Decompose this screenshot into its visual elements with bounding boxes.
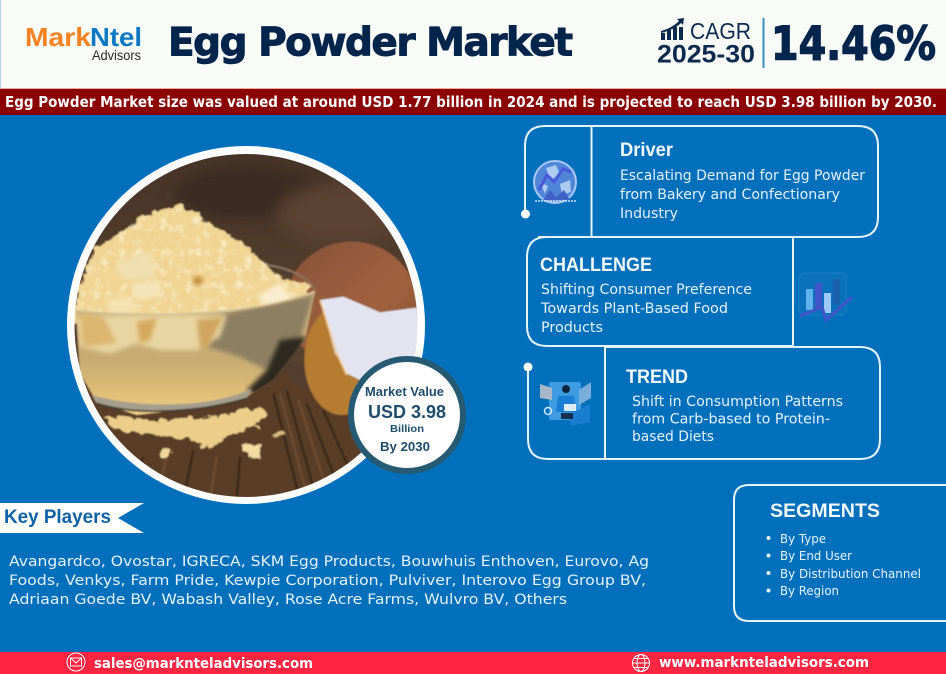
key players ribbon: Key Players bbox=[4, 506, 111, 528]
website: www.marknteladvisors.com bbox=[659, 655, 869, 671]
panel: trend bbox=[524, 347, 880, 460]
segments heading: SEGMENTS bbox=[770, 500, 880, 522]
footer bar bbox=[0, 652, 946, 674]
CAGR block: 2025-30 bbox=[657, 40, 755, 68]
challenge text: Towards Plant-Based Food bbox=[540, 301, 728, 317]
CAGR block: CAGR bbox=[690, 18, 751, 44]
powder pile bbox=[70, 205, 311, 323]
key players list: Avangardco, Ovostar, IGRECA, SKM Egg Products, Bouwhuis Enthoven, Eurovo, Ag bbox=[9, 554, 649, 570]
icon: globe with growth arrow bbox=[534, 161, 577, 203]
panel: segments bbox=[734, 485, 946, 621]
icon: growth bars bbox=[661, 18, 684, 40]
challenge text: Products bbox=[541, 320, 603, 336]
key players list: Foods, Venkys, Farm Pride, Kewpie Corporation, Pulviver, Interovo Egg Group BV, bbox=[9, 573, 646, 589]
glass bowl with powder bbox=[76, 292, 315, 415]
driver text: Industry bbox=[620, 206, 678, 222]
challenge text: Shifting Consumer Preference bbox=[541, 282, 752, 298]
challenge text bbox=[540, 282, 752, 336]
key players list: Adriaan Goede BV, Wabash Valley, Rose Acre Farms, Wulvro BV, Others bbox=[9, 592, 567, 608]
panel: challenge bbox=[527, 237, 852, 347]
title: Egg Powder Market bbox=[168, 20, 573, 66]
badge: market value: Market Value bbox=[365, 385, 444, 399]
key players list bbox=[9, 554, 649, 608]
segments list: By Region bbox=[780, 584, 839, 598]
logo: MarkNtel Advisors bbox=[25, 22, 142, 63]
logo: MarkNtel Advisors: Mark bbox=[25, 22, 92, 52]
trend text: Shift in Consumption Patterns bbox=[632, 394, 843, 410]
driver heading: Driver bbox=[620, 140, 674, 161]
panel: driver bbox=[521, 126, 878, 237]
brown egg bbox=[290, 240, 416, 350]
icon: globe bbox=[632, 654, 650, 672]
eggshell inside bbox=[320, 297, 423, 380]
badge: market value: Billion bbox=[390, 423, 424, 435]
trend text: from Carb-based to Protein- bbox=[632, 412, 830, 428]
driver text bbox=[620, 168, 865, 222]
trend heading: TREND bbox=[626, 367, 688, 388]
icon: email bbox=[67, 653, 85, 671]
badge: market value: USD 3.98 bbox=[368, 402, 446, 422]
CAGR block bbox=[657, 16, 936, 70]
icon: person with dashboards bbox=[540, 382, 591, 426]
logo: MarkNtel Advisors: Advisors bbox=[92, 48, 141, 63]
driver text: Escalating Demand for Egg Powder bbox=[620, 168, 865, 184]
driver text: from Bakery and Confectionary bbox=[620, 187, 840, 203]
challenge heading: CHALLENGE bbox=[540, 255, 652, 276]
icon: bar chart with falling arrow bbox=[799, 273, 852, 320]
trend text bbox=[632, 394, 843, 445]
logo: MarkNtel Advisors: Ntel bbox=[90, 22, 142, 52]
email address: sales@marknteladvisors.com bbox=[94, 656, 313, 672]
badge: market value bbox=[351, 359, 463, 471]
segments list: By Type bbox=[780, 532, 826, 546]
segments list: By End User bbox=[780, 549, 852, 563]
table wood bbox=[135, 438, 357, 497]
hero photo: egg powder in glass bowl bbox=[60, 140, 427, 507]
header bar bbox=[0, 0, 946, 88]
summary banner bbox=[0, 88, 946, 115]
key players ribbon bbox=[0, 503, 144, 533]
spilled crumbs bbox=[103, 407, 287, 458]
segments list bbox=[766, 532, 921, 598]
badge: market value: By 2030 bbox=[380, 440, 430, 454]
segments list: By Distribution Channel bbox=[780, 567, 921, 581]
trend text: based Diets bbox=[632, 429, 714, 445]
